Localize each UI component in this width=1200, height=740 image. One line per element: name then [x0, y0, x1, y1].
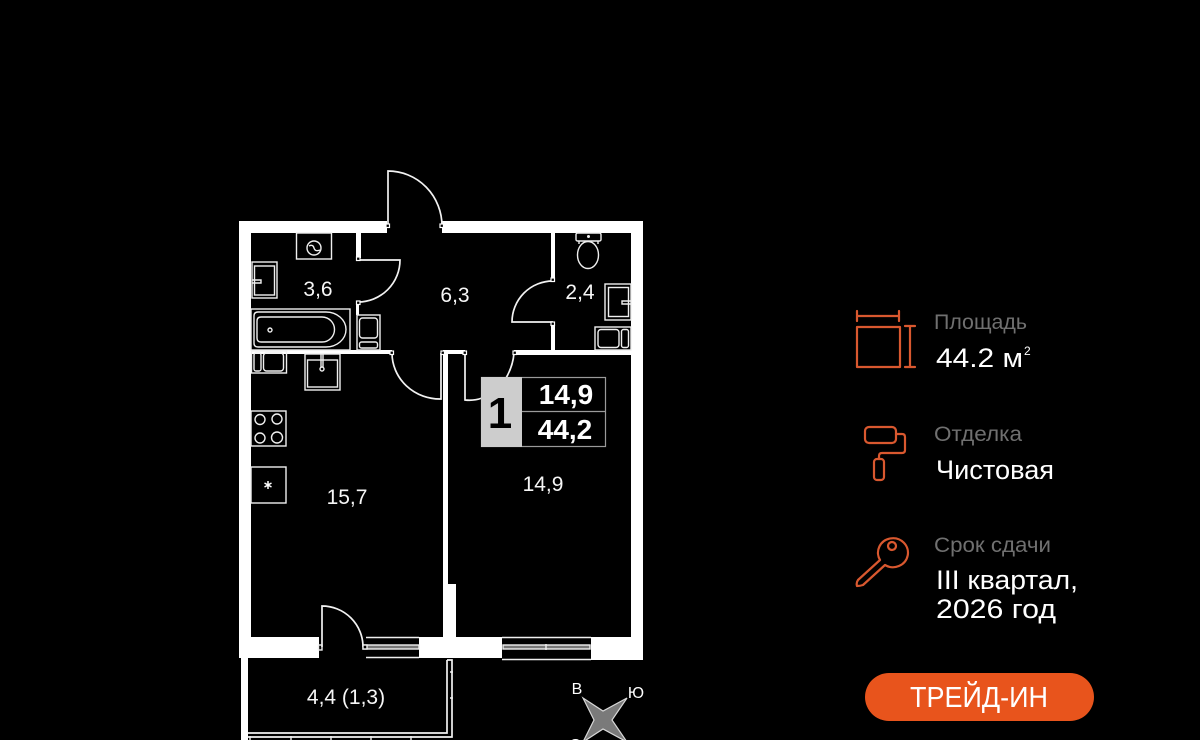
date heading: Срок сдачи: [934, 534, 1051, 557]
compass label south: Ю: [628, 685, 644, 702]
door: bathroom: [358, 260, 400, 302]
compass: [569, 681, 644, 740]
date value line 2: 2026 год: [936, 594, 1056, 624]
door: toilet: [512, 281, 553, 322]
badge total area: 44,2: [538, 414, 592, 445]
fridge: [251, 467, 286, 503]
icon: key: [857, 538, 908, 586]
area label 3,6: 3,6: [303, 278, 333, 301]
kitchen sink: [305, 354, 340, 390]
dishwasher: [252, 351, 286, 373]
icon: paint roller: [865, 427, 905, 480]
finish heading: Отделка: [934, 423, 1022, 446]
door: entrance: [388, 171, 442, 226]
badge room area: 14,9: [539, 379, 593, 410]
toilet: [576, 233, 601, 268]
area label 15,7: 15,7: [327, 486, 367, 509]
finish value: Чистовая: [936, 455, 1054, 485]
apartment badge: [481, 377, 606, 447]
stove: [251, 411, 286, 446]
washer: [595, 327, 631, 350]
area label 2,4: 2,4: [565, 281, 595, 304]
button label: ТРЕЙД-ИН: [910, 680, 1048, 714]
area heading: Площадь: [934, 311, 1027, 334]
area label 14,9: 14,9: [523, 473, 563, 496]
bathroom sink: [252, 262, 277, 298]
door: balcony: [322, 606, 363, 647]
area superscript: 2: [1024, 344, 1031, 358]
apartment walls: [239, 221, 643, 660]
area label balcony: 4,4 (1,3): [307, 686, 385, 709]
bathtub: [251, 309, 350, 350]
door hinges: [356, 224, 554, 354]
compass label east: В: [572, 681, 582, 698]
info: delivery date: [857, 534, 1078, 624]
balcony: [241, 658, 453, 740]
area label 6,3: 6,3: [440, 284, 470, 307]
badge number: 1: [488, 389, 512, 438]
hall cabinet: [357, 315, 380, 350]
trade-in button: [865, 673, 1094, 721]
info: area: [857, 311, 1031, 373]
info: finish: [865, 423, 1054, 485]
door arc: room entry: [506, 353, 514, 378]
floor plan: [239, 171, 643, 740]
date value line 1: III квартал,: [936, 565, 1078, 595]
door: kitchen: [392, 353, 441, 399]
icon: area dimensions: [857, 311, 915, 367]
window: room: [502, 638, 591, 660]
window: kitchen: [318, 638, 419, 658]
toilet room sink: [605, 284, 631, 320]
area value: 44.2 м: [936, 343, 1023, 373]
door: room: [465, 353, 482, 400]
washing machine: [296, 233, 332, 259]
